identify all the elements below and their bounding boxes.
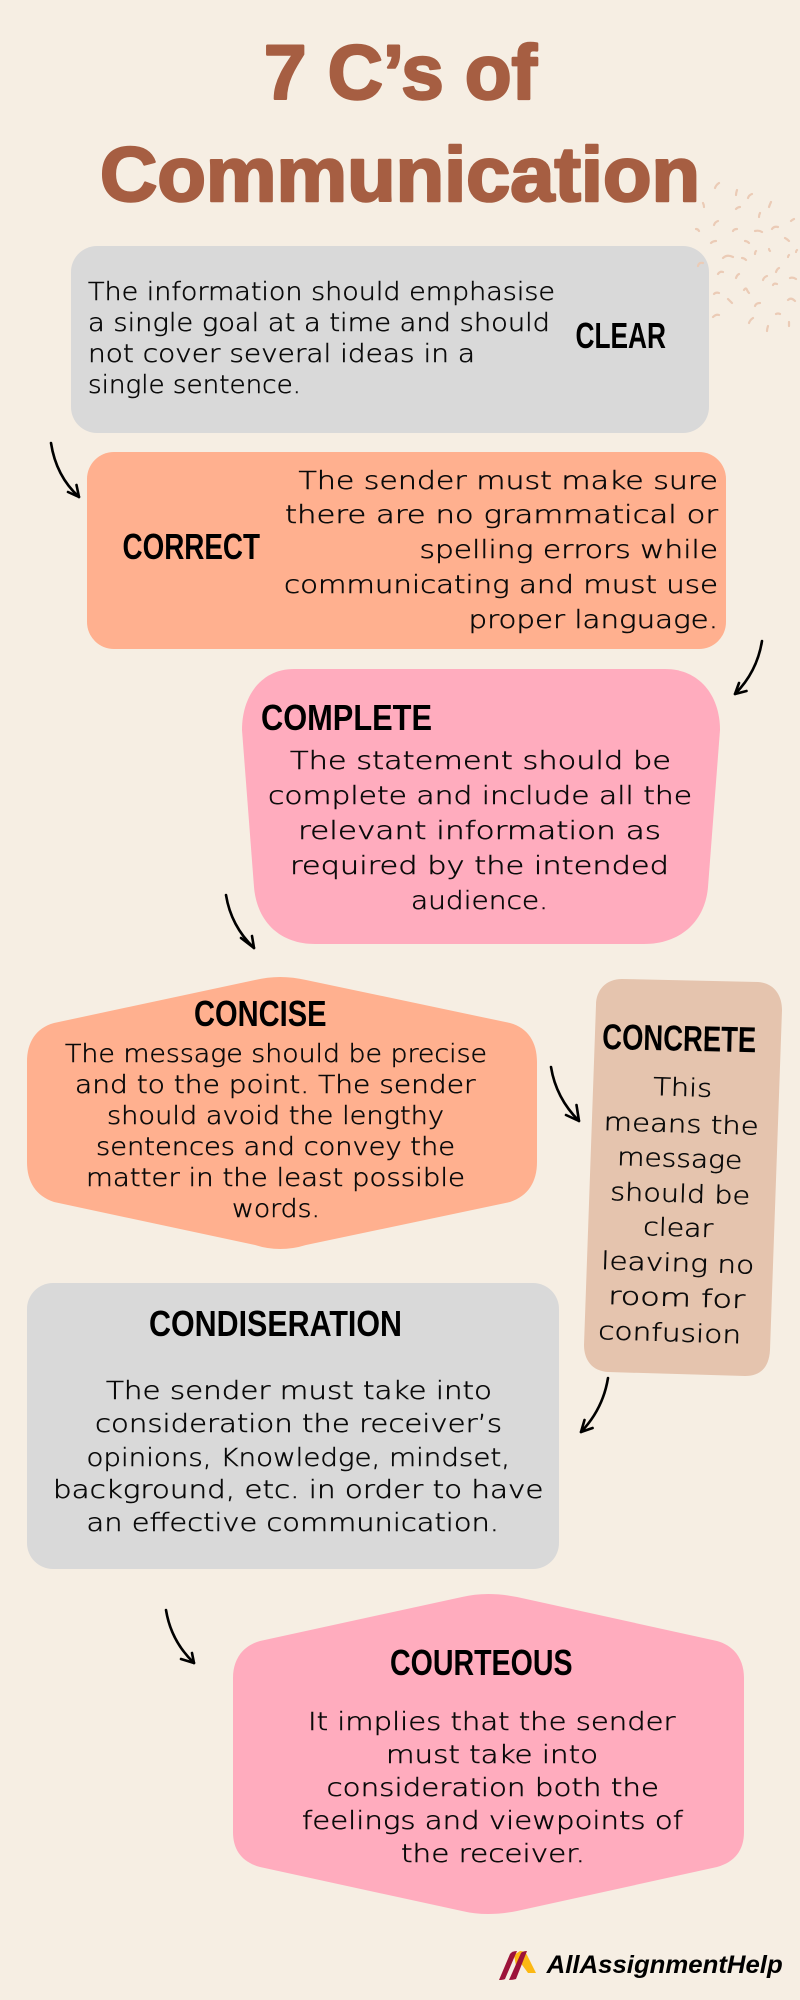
- concrete description: clear: [643, 1212, 715, 1243]
- arrow: clear to correct: [51, 443, 79, 497]
- correct description: communicating and must use: [284, 570, 718, 599]
- decorative speckle cluster: [696, 183, 797, 331]
- condiseration description: consideration the receiver’s: [95, 1409, 502, 1438]
- concrete description: This: [653, 1072, 713, 1103]
- courteous heading: COURTEOUS: [390, 1642, 572, 1683]
- courteous description: consideration both the: [326, 1773, 659, 1802]
- complete description: audience.: [411, 886, 548, 915]
- clear description: The information should emphasise: [88, 277, 555, 306]
- condiseration heading: CONDISERATION: [149, 1303, 402, 1344]
- clear description: not cover several ideas in a: [88, 339, 475, 368]
- condiseration description: [53, 1376, 544, 1537]
- complete description: required by the intended: [290, 851, 669, 880]
- condiseration description: The sender must take into: [106, 1376, 492, 1405]
- concrete heading: CONCRETE: [602, 1016, 757, 1060]
- courteous description: feelings and viewpoints of: [302, 1806, 683, 1835]
- concrete description: means the: [603, 1107, 759, 1141]
- arrow: complete to concise: [226, 895, 254, 948]
- clear description: [88, 277, 555, 399]
- arrow: correct to complete: [735, 641, 762, 694]
- logo: AllAssignmentHelp: [499, 1951, 783, 1980]
- concise description: and to the point. The sender: [75, 1070, 477, 1099]
- correct heading: CORRECT: [122, 526, 260, 567]
- correct description: spelling errors while: [420, 535, 718, 564]
- complete heading: COMPLETE: [261, 697, 432, 738]
- concrete description: leaving no: [601, 1246, 755, 1280]
- correct description: proper language.: [468, 605, 718, 634]
- panel: correct: [87, 452, 726, 649]
- clear heading: CLEAR: [576, 315, 666, 356]
- logo wordmark: AllAssignmentHelp: [546, 1951, 783, 1979]
- icon: logo mark: [499, 1951, 536, 1980]
- complete description: complete and include all the: [268, 781, 692, 810]
- concrete description: [598, 1072, 759, 1349]
- concise description: matter in the least possible: [86, 1163, 465, 1192]
- correct description: there are no grammatical or: [285, 500, 719, 529]
- condiseration description: background, etc. in order to have: [53, 1475, 544, 1504]
- courteous description: must take into: [386, 1740, 598, 1769]
- courteous description: It implies that the sender: [308, 1707, 677, 1736]
- panel: courteous: [233, 1594, 744, 1914]
- courteous description: [302, 1707, 683, 1868]
- correct description: The sender must make sure: [298, 466, 718, 495]
- concise description: The message should be precise: [65, 1039, 487, 1068]
- concise description: words.: [232, 1194, 320, 1223]
- condiseration description: opinions, Knowledge, mindset,: [86, 1443, 510, 1472]
- concrete description: message: [617, 1142, 743, 1175]
- arrow: concise to concrete: [551, 1067, 579, 1121]
- panel: concise: [27, 977, 537, 1249]
- title: 7 C’s of: [264, 30, 537, 116]
- courteous description: the receiver.: [401, 1839, 585, 1868]
- complete description: [268, 746, 692, 915]
- condiseration description: an effective communication.: [86, 1508, 499, 1537]
- arrow: concrete to condiseration: [581, 1378, 608, 1432]
- concise description: should avoid the lengthy: [107, 1101, 444, 1130]
- clear description: single sentence.: [88, 370, 301, 399]
- complete description: The statement should be: [290, 746, 671, 775]
- title: [100, 30, 700, 218]
- clear description: a single goal at a time and should: [88, 308, 550, 337]
- concise description: sentences and convey the: [96, 1132, 455, 1161]
- panel: concrete: [584, 979, 782, 1376]
- title: Communication: [100, 132, 700, 218]
- complete description: relevant information as: [298, 816, 661, 845]
- concise heading: CONCISE: [194, 993, 326, 1034]
- concrete description: should be: [610, 1177, 751, 1210]
- concrete description: room for: [608, 1281, 747, 1314]
- panel: clear: [71, 246, 709, 433]
- panel: complete: [242, 669, 720, 944]
- panel: condiseration: [27, 1283, 559, 1569]
- concise description: [65, 1039, 487, 1223]
- concrete description: confusion: [598, 1316, 742, 1349]
- correct description: [284, 466, 719, 634]
- arrow: condiseration to courteous: [166, 1610, 194, 1663]
